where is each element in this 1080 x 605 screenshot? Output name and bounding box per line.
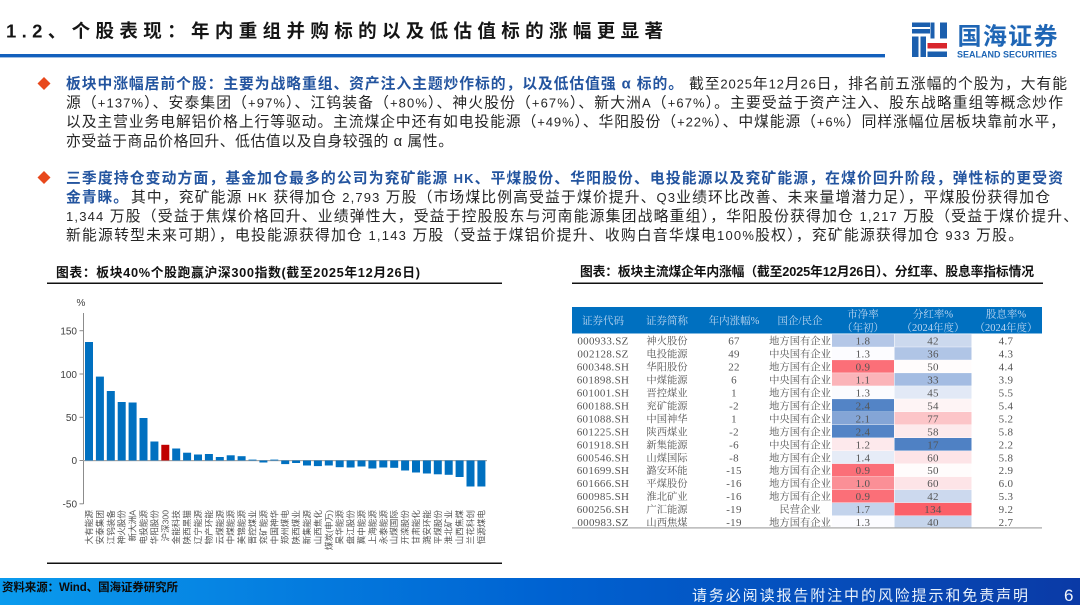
table rows: 中央国有企业 [769,348,831,360]
table rows: 0.9 [856,465,871,477]
table rows: 600546.SH [577,452,629,464]
table rows: -8 [729,452,739,464]
category labels: 物产环能 [203,510,214,544]
category labels: 上海能源 [366,510,377,544]
table rows: -6 [729,439,739,451]
table header: 国企/民企 [778,314,823,327]
table rows: 0.9 [856,361,871,373]
table rows: 1.3 [856,517,871,529]
bold lead sentence [66,169,1063,206]
table rows: 601001.SH [577,387,629,399]
table rows: 5.8 [999,426,1014,438]
table rows: 华阳股份 [646,360,688,373]
table rows: 60 [927,452,939,464]
table rows: 电投能源 [646,348,688,360]
table rows: 2.9 [999,465,1014,477]
table rows: 地方国有企业 [769,334,831,348]
bold lead sentence: 板块中涨幅居前个股：主要为战略重组、资产注入主题炒作标的，以及低估值强 α 标的。 [66,74,683,92]
icon: logo mark [912,22,947,57]
category labels: 甘肃能化 [410,510,421,544]
chart heading: 图表：板块40%个股跑赢沪深300指数(截至2025年12月26日) [56,265,420,280]
table rows: 地方国有企业 [769,399,831,412]
table rows: -2 [729,400,739,412]
logo wordmark: 国海证券 [958,24,1058,50]
category labels: 山西焦化 [312,510,323,544]
category labels: 华阳股份 [148,510,159,544]
table rows: 1 [731,413,737,425]
category labels [83,510,486,550]
table rows: 600256.SH [577,504,629,516]
body text: 其中，兖矿能源 HK 获得加仓 2,793 万股（市场煤比例高受益于煤价提升、Q3业绩环比改善、未来量增潜力足），平煤股份获得加仓 [131,189,1050,206]
heatmap cells [832,334,972,528]
body text: 亦受益于商品价格回升、低估值以及自身较强的 α 属性。 [66,132,453,150]
table header: 股息率% [986,308,1026,320]
table rows: 1.4 [856,452,871,464]
table rows: -19 [726,517,742,529]
table rows: 54 [927,400,939,412]
table rows: 5.3 [999,491,1014,503]
title: 1.2、个股表现：年内重组并购标的以及低估值标的涨幅更显著 [6,20,663,42]
table rows: 山西焦煤 [646,516,688,529]
category labels: 兰花科创 [464,510,476,544]
table rows: 601918.SH [577,439,629,451]
table rows: -16 [726,478,742,490]
table rows: 49 [728,348,740,360]
table header: 证券代码 [582,314,624,327]
icon: red diamond [38,171,50,184]
table header [572,307,1042,334]
table rows: 50 [927,465,939,477]
header rule [0,54,885,57]
category labels: 大有能源 [83,510,94,544]
table rows: 4.3 [999,348,1014,360]
table rows: 6.0 [999,478,1014,490]
y axis: 0 [71,456,77,467]
table rows: 601225.SH [577,426,629,438]
category labels: 淮北矿业 [443,510,454,544]
y axis: -50 [63,500,77,510]
footer bar [0,578,1080,605]
body text: 1,344 万股（受益于焦煤价格回升、业绩弹性大，受益于控股股东与河南能源集团战略重组），华阳股份获得加仓 1,217 万股（受益于煤价提升、 [66,208,1078,225]
y axis [60,298,86,510]
panel: left chart [47,265,502,564]
y axis: 50 [66,413,77,424]
table rows: 600985.SH [577,491,629,503]
table rows: 中国神华 [646,412,688,425]
table rows: 40 [927,517,939,529]
category labels: 新大洲A [127,510,138,542]
category labels: 安泰集团 [94,510,105,544]
category labels: 盘江股份 [345,510,356,544]
table rows [577,334,1014,529]
category labels: 永泰能源 [377,510,388,544]
logo English name: SEALAND SECURITIES [957,50,1057,60]
table rows: 5.4 [999,400,1014,412]
table header: （年初） [842,321,884,334]
table rows: 1.0 [856,478,871,490]
table rows: 地方国有企业 [769,490,831,503]
table rows: 0.9 [856,491,871,503]
table rows: 广汇能源 [646,503,688,516]
table rows: 58 [927,426,939,438]
table rows: 5.5 [999,387,1014,399]
body text [66,76,1067,150]
category labels: 潞安环能 [421,510,432,544]
table rows: 002128.SZ [577,348,629,360]
body text: 以及主营业务电解铝价格上行等驱动。主流煤企中还有如电投能源（+49%）、华阳股份（+22%）、中煤能源（+6%）同样涨幅位居板块靠前水平， [66,112,1065,130]
category labels: 山煤国际 [388,510,399,544]
table rows: 民营企业 [779,503,821,516]
category labels: 江钨装备 [105,510,116,544]
category labels: 云煤能源 [214,510,225,544]
category labels: 新集能源 [301,510,312,544]
category labels: 沪深300 [159,510,170,542]
table header: （2024年度） [902,321,964,334]
category labels: 晋控煤业 [246,510,258,544]
bar chart [60,298,487,550]
table rows: 2.7 [999,517,1014,529]
table rows: 17 [927,439,939,451]
category labels: 中煤能源 [225,510,236,544]
table rows: 地方国有企业 [769,360,831,373]
table rows: 67 [728,336,740,348]
table rows: 600348.SH [577,361,629,373]
table rows: 2.4 [856,400,871,412]
bold lead sentence: 金青睐。 [66,188,128,206]
table rows: 地方国有企业 [769,477,831,490]
table rows: -16 [726,491,742,503]
page number: 6 [1064,586,1073,605]
table rows: 601699.SH [577,465,629,477]
table header: （2024年度） [974,321,1038,334]
category labels: 辽宁能源 [192,510,203,544]
bars [85,342,485,486]
bullet block 2 [38,169,1078,244]
y axis: 100 [60,370,77,381]
table rows: 42 [927,491,939,503]
category labels: 郑州煤电 [279,510,290,544]
category labels: 煤炭(申万) [323,510,334,550]
body text: 源（+137%）、安泰集团（+97%）、江钨装备（+80%）、神火股份（+67%）、新大洲A（+67%）。主要受益于资产注入、股东战略重组等概念炒作 [66,94,1063,112]
category labels: 美锦能源 [236,510,247,544]
category labels: 昊华能源 [334,510,345,544]
y axis: % [77,298,86,309]
category labels: 恒源煤电 [475,510,486,544]
table rows: 60 [927,478,939,490]
table rows: -15 [726,465,742,477]
table rows: 地方国有企业 [769,516,831,529]
table header: 分红率% [913,308,953,320]
category labels: 神火股份 [116,510,127,544]
table header: 年内涨幅% [709,314,760,327]
logo: Sealand Securities [912,22,1058,60]
table rows: 22 [728,361,740,373]
table rows: 2.4 [856,426,871,438]
table rows: 9.2 [999,504,1013,516]
table rows: 000933.SZ [577,336,629,348]
table rows: 6 [731,374,737,386]
panel: right table [572,264,1043,529]
table rows: 地方国有企业 [769,451,831,464]
category labels: 平煤股份 [432,510,443,544]
x axis [83,460,487,461]
table rows: 平煤股份 [646,477,688,490]
table heading: 图表：板块主流煤企年内涨幅（截至2025年12月26日）、分红率、股息率指标情况 [580,264,1034,279]
table rows: 山煤国际 [646,451,688,464]
table rows: 陕西煤业 [646,425,688,438]
table rows: 神火股份 [646,334,688,348]
table rows: 1.3 [856,348,871,360]
table rows: 42 [927,336,939,348]
icon: red diamond [38,77,50,90]
table rows: 1.7 [856,504,871,516]
table rows: 中央国有企业 [769,438,831,451]
source note: 资料来源：Wind、国海证券研究所 [2,580,178,594]
table rows: 1.8 [856,336,871,348]
table rows: 1.1 [856,374,870,386]
table rows: 33 [927,374,939,386]
table rows: 1.2 [856,439,870,451]
category labels: 冀中能源 [356,510,366,544]
table rows: 50 [927,361,939,373]
table rows: 兖矿能源 [646,399,688,412]
table rows: 晋控煤业 [646,386,688,399]
category labels: 电投能源 [138,510,148,544]
body text [66,189,1078,244]
bold lead sentence: 三季度持仓变动方面，基金加仓最多的公司为兖矿能源 HK、平煤股份、华阳股份、电投能源以及兖矿能源，在煤价回升阶段，弹性标的更受资 [66,169,1063,187]
category labels: 金能科技 [170,510,181,544]
y axis: 150 [60,326,77,338]
table rows: -19 [726,504,742,516]
category labels: 兖矿能源 [257,510,268,544]
table rows: 4.7 [999,336,1014,348]
category labels: 中国神华 [268,510,279,544]
table rows: 77 [927,413,939,425]
table rows: 36 [927,348,939,360]
table rows: 中煤能源 [646,373,688,386]
table rows: 601666.SH [577,478,629,490]
table rows: 地方国有企业 [769,386,831,399]
table rows: 4.4 [999,361,1014,373]
table rows: 45 [927,387,939,399]
category labels: 山西焦煤 [454,510,465,544]
table rows: 600188.SH [577,400,629,412]
table rows: 2.2 [999,439,1013,451]
table header: 市净率 [847,308,879,320]
category labels: 陕西煤业 [290,510,301,544]
body text: 截至2025年12月26日，排名前五涨幅的个股为，大有能 [689,76,1067,92]
table rows: 601088.SH [577,413,629,425]
table rows: -2 [729,426,739,438]
table rows: 地方国有企业 [769,464,831,477]
category labels: 开滦股份 [399,510,410,544]
table rows: 潞安环能 [646,464,688,477]
table rows: 5.8 [999,452,1014,464]
table rows: 1.3 [856,387,871,399]
table rows: 中央国有企业 [769,412,831,425]
table rows: 134 [924,504,942,516]
table rows: 2.1 [856,413,870,425]
table rows: 新集能源 [646,438,688,451]
table rows: 5.2 [999,413,1013,425]
body text: 新能源转型未来可期），电投能源获得加仓 1,143 万股（受益于煤铝价提升、收购白音华煤电100%股权），兖矿能源获得加仓 933 万股。 [66,227,1023,244]
table rows: 000983.SZ [577,517,629,529]
table header: 证券简称 [646,314,688,327]
table rows: 中央国有企业 [769,373,831,386]
disclaimer: 请务必阅读报告附注中的风险提示和免责声明 [692,586,1028,604]
table rows: 1 [731,387,737,399]
category labels: 陕西黑猫 [181,510,192,544]
bullet block 1 [38,74,1067,150]
table rows: 3.9 [999,374,1014,386]
table rows: 淮北矿业 [646,490,688,503]
table rows: 地方国有企业 [769,425,831,438]
table rows: 601898.SH [577,374,629,386]
